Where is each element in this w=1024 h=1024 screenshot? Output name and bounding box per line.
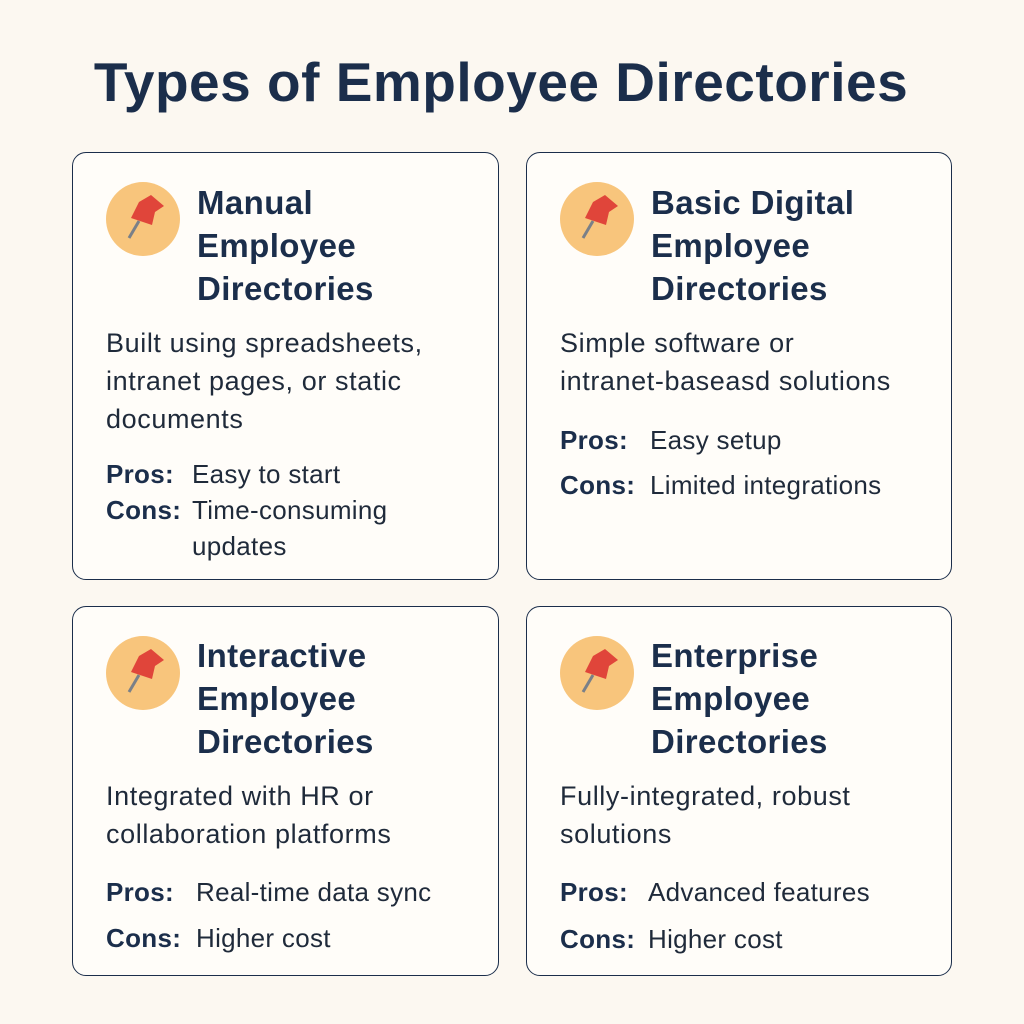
heading: Employee: [651, 227, 810, 264]
heading: [197, 637, 374, 760]
heading: Manual: [197, 184, 313, 221]
icon: pushpin: [106, 636, 180, 710]
heading: [651, 637, 828, 760]
icon: pushpin: [560, 636, 634, 710]
heading: Enterprise: [651, 637, 818, 674]
description: Built using spreadsheets,: [106, 328, 423, 358]
pros/cons: Real-time data sync: [196, 877, 431, 907]
pros/cons: [560, 877, 870, 954]
pros/cons: Time-consuming: [192, 495, 387, 525]
pros/cons: Cons:: [560, 924, 635, 954]
pros/cons: Pros:: [560, 877, 628, 907]
pros/cons: Pros:: [560, 425, 628, 455]
pros/cons: Easy setup: [650, 425, 782, 455]
pros/cons: Limited integrations: [650, 470, 881, 500]
heading: Directories: [651, 270, 828, 307]
pros/cons: [106, 877, 431, 953]
heading: [197, 184, 374, 307]
pros/cons: Pros:: [106, 459, 174, 489]
description: solutions: [560, 819, 672, 849]
panel: manual: [72, 152, 499, 580]
pros/cons: Pros:: [106, 877, 174, 907]
heading: Employee: [197, 227, 356, 264]
description: Fully-integrated, robust: [560, 781, 851, 811]
heading: Directories: [197, 270, 374, 307]
description: [560, 781, 851, 849]
description: [560, 328, 891, 396]
heading: Basic Digital: [651, 184, 854, 221]
description: Integrated with HR or: [106, 781, 374, 811]
pros/cons: Higher cost: [648, 924, 783, 954]
pros/cons: Cons:: [106, 923, 181, 953]
icon: pushpin: [560, 182, 634, 256]
heading: Directories: [651, 723, 828, 760]
pros/cons: Easy to start: [192, 459, 340, 489]
panel: enterprise: [526, 606, 952, 976]
pros/cons: Cons:: [560, 470, 635, 500]
description: intranet pages, or static: [106, 366, 402, 396]
description: intranet-baseasd solutions: [560, 366, 891, 396]
icon: pushpin: [106, 182, 180, 256]
description: [106, 328, 423, 434]
pros/cons: [560, 425, 881, 500]
pros/cons: [106, 459, 387, 561]
heading: Employee: [197, 680, 356, 717]
title: Types of Employee Directories: [94, 51, 908, 113]
description: [106, 781, 391, 849]
panel: interactive: [72, 606, 499, 976]
pros/cons: Advanced features: [648, 877, 870, 907]
description: Simple software or: [560, 328, 794, 358]
pros/cons: Higher cost: [196, 923, 331, 953]
description: documents: [106, 404, 243, 434]
heading: [651, 184, 854, 307]
heading: Employee: [651, 680, 810, 717]
pros/cons: Cons:: [106, 495, 181, 525]
panel: basic digital: [526, 152, 952, 580]
heading: Interactive: [197, 637, 366, 674]
pros/cons: updates: [192, 531, 287, 561]
description: collaboration platforms: [106, 819, 391, 849]
heading: Directories: [197, 723, 374, 760]
